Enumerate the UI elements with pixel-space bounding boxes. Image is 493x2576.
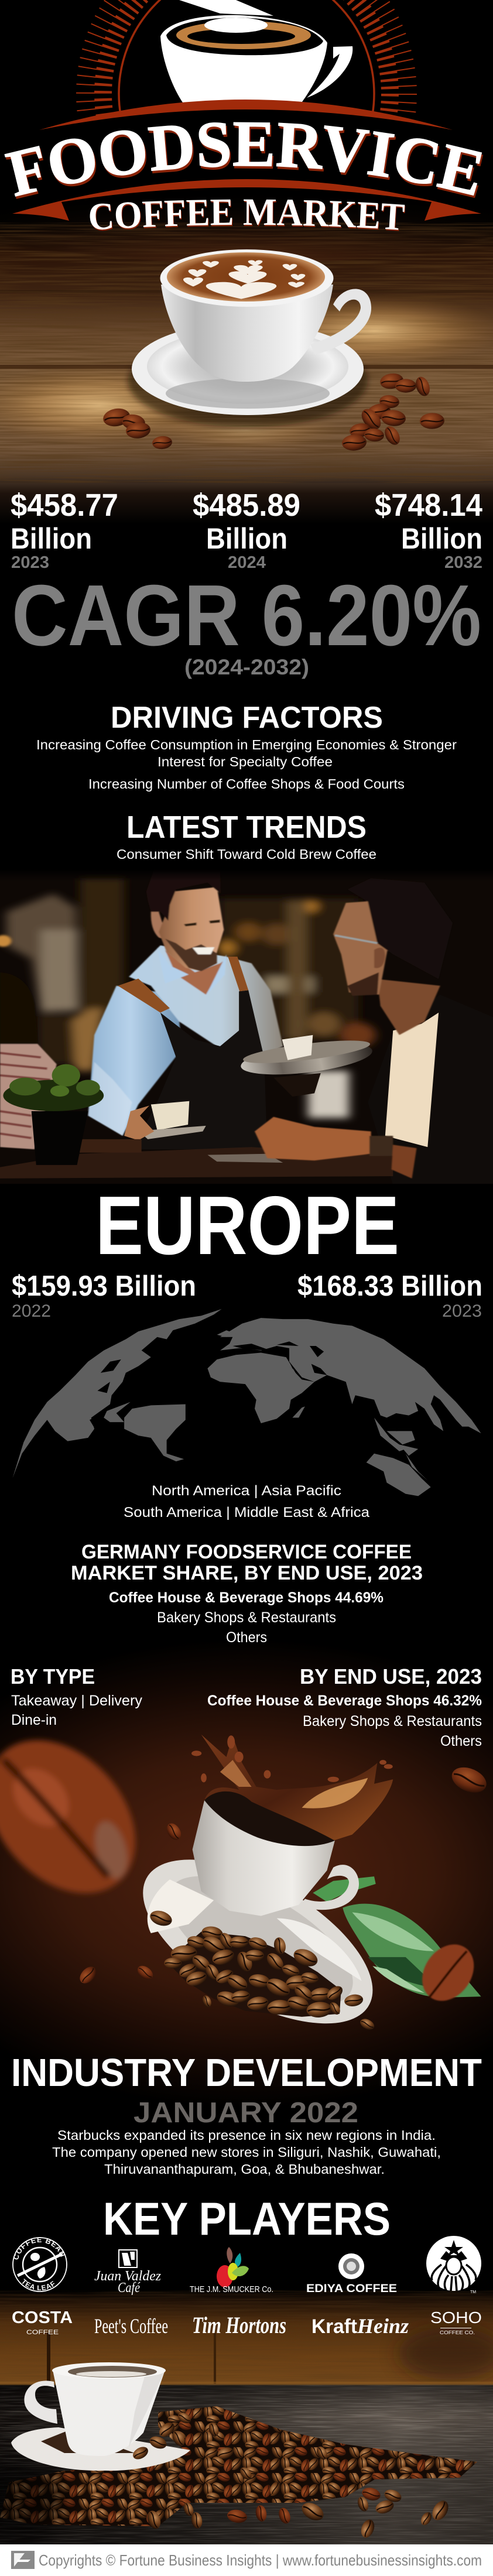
logo: Juan Valdez Cafe: Juan Valdez bbox=[94, 2269, 162, 2284]
panel: market size statistics bbox=[11, 488, 482, 679]
logo: Tim Hortons: Tim Hortons bbox=[192, 2312, 286, 2338]
table top bbox=[0, 2384, 493, 2544]
segment: by type: Dine-in bbox=[11, 1712, 57, 1728]
icon: coffee beans left group bbox=[102, 406, 173, 450]
development description: The company opened new stores in Siliguri, Nashik, Guwahati, bbox=[52, 2145, 441, 2160]
stat 2023: 2023 bbox=[11, 553, 49, 572]
logo: Kraft Heinz: Heinz bbox=[357, 2314, 409, 2338]
driving factors list: Increasing Coffee Consumption in Emerging Economies & Stronger bbox=[36, 737, 457, 752]
stat 2023 bbox=[11, 488, 118, 572]
logo: Coffee Bean & Tea Leaf: COFFEE BEAN bbox=[14, 2237, 66, 2260]
segment: by type: BY TYPE bbox=[11, 1664, 95, 1688]
logo: Juan Valdez Cafe: Café bbox=[118, 2280, 141, 2296]
barista head bbox=[146, 869, 224, 971]
segment: by end use: Coffee House & Beverage Shops 46.32% bbox=[207, 1693, 482, 1709]
heading: EUROPE: EUROPE bbox=[95, 1179, 399, 1272]
panel: segments with coffee illustration bbox=[0, 1664, 491, 2056]
stat Europe 2023 bbox=[297, 1270, 482, 1321]
South America bbox=[124, 1405, 186, 1461]
Southeast Asia islands bbox=[374, 1417, 427, 1481]
stat Europe 2022: 2022 bbox=[12, 1301, 51, 1321]
scattered loose beans bbox=[145, 2486, 451, 2540]
tray with cup bbox=[238, 1035, 375, 1097]
British Isles and Scandinavia bbox=[217, 1330, 236, 1337]
stat 2032: $748.14 bbox=[375, 488, 482, 523]
segment: by end use: Bakery Shops & Restaurants bbox=[303, 1713, 482, 1729]
loose flying beans bbox=[77, 1762, 491, 1986]
title: COFFEE MARKET: COFFEE MARKET bbox=[90, 199, 405, 231]
dark bed under saucer beans bbox=[167, 1931, 341, 2017]
driving factors list bbox=[36, 737, 457, 792]
heading: Germany market share: GERMANY FOODSERVICE COFFEE bbox=[81, 1541, 412, 1563]
wood table backdrop bbox=[0, 170, 493, 486]
stat Europe 2022 bbox=[12, 1270, 196, 1321]
saucer bbox=[11, 2427, 190, 2471]
footer brand icon bbox=[11, 2551, 35, 2569]
Caribbean bbox=[104, 1402, 131, 1422]
illustration: cup, saucer, splash, leaf and beans bbox=[77, 1735, 491, 2056]
stat 2023: $458.77 bbox=[11, 488, 118, 523]
logo: Kraft Heinz: Kraft bbox=[311, 2315, 357, 2338]
logo: Coffee Bean & Tea Leaf bbox=[12, 2237, 67, 2292]
photo: barista serving customer bbox=[0, 867, 493, 1185]
woman at left bbox=[0, 972, 57, 1149]
key player logos bbox=[12, 2236, 482, 2338]
date: JANUARY 2022 bbox=[133, 2097, 358, 2129]
list of other regions bbox=[124, 1483, 370, 1520]
customer jacket bbox=[368, 995, 493, 1185]
segment: by type bbox=[11, 1664, 142, 1728]
logo: Peet's Coffee: Peet's Coffee bbox=[94, 2314, 168, 2338]
plant bbox=[3, 1064, 104, 1165]
latte art hearts bbox=[183, 260, 305, 299]
icon: latte cup on saucer bbox=[128, 249, 371, 427]
saucer bbox=[115, 1827, 400, 2056]
panel: latest trends bbox=[117, 810, 376, 862]
CAGR period: (2024-2032) bbox=[184, 655, 309, 679]
stat 2024: $485.89 bbox=[193, 488, 300, 523]
icon: logo sunburst rays bbox=[76, 0, 417, 116]
Germany share list bbox=[109, 1590, 384, 1646]
stat 2032: 2032 bbox=[444, 553, 482, 572]
icon: coffee beans right group bbox=[341, 372, 444, 451]
barista torso bbox=[88, 946, 283, 1136]
icon: large blurred coffee bean bbox=[0, 1711, 165, 1922]
logo: The J.M. Smucker Co. bbox=[190, 2247, 273, 2294]
photo background bbox=[0, 867, 493, 1185]
icon: logo coffee cup bbox=[160, 0, 352, 104]
blurred bean over leaf bbox=[412, 1936, 484, 2010]
photo: cup and coffee beans on table bbox=[0, 2290, 493, 2544]
driving factors list: Interest for Specialty Coffee bbox=[158, 754, 333, 769]
segment: by end use bbox=[207, 1664, 482, 1749]
world map globe bbox=[12, 1309, 481, 1496]
Australia bbox=[367, 1454, 431, 1496]
shadow over left side of pile bbox=[0, 2465, 70, 2535]
customer hand bbox=[255, 1117, 417, 1179]
logo: Coffee Bean & Tea Leaf: TEA LEAF bbox=[22, 2279, 55, 2290]
logo: Ediya Coffee: EDIYA COFFEE bbox=[306, 2283, 397, 2295]
logo: Costa Coffee: COFFEE bbox=[26, 2329, 59, 2336]
logo: Soho Coffee Co. bbox=[430, 2308, 482, 2335]
table bbox=[0, 1147, 393, 1179]
stat Europe 2023: $168.33 Billion bbox=[297, 1270, 482, 1302]
heading: Germany market share bbox=[71, 1541, 423, 1584]
development description: Starbucks expanded its presence in six new regions in India. bbox=[57, 2128, 436, 2143]
photo top fade bbox=[0, 869, 493, 881]
Germany share list: Others bbox=[226, 1629, 267, 1646]
trend text: Consumer Shift Toward Cold Brew Coffee bbox=[117, 847, 376, 862]
stat 2032 bbox=[375, 488, 482, 572]
beans overlapping cup bbox=[131, 2410, 330, 2496]
stat 2024: 2024 bbox=[228, 553, 266, 572]
logo: Soho Coffee Co.: SOHO bbox=[430, 2308, 482, 2327]
segment: by type: Takeaway | Delivery bbox=[11, 1693, 142, 1709]
panel: industry development bbox=[11, 2051, 482, 2177]
fade from table to black bbox=[0, 483, 493, 524]
segment: by end use: Others bbox=[440, 1733, 482, 1749]
stat 2023: Billion bbox=[11, 522, 92, 555]
heading: driving factors: DRIVING FACTORS bbox=[111, 701, 383, 735]
development description bbox=[52, 2128, 441, 2177]
logo: Starbucks siren bbox=[426, 2236, 481, 2294]
cup body bbox=[193, 1791, 359, 1916]
beans on saucer bbox=[148, 1908, 376, 2032]
cup in hand bbox=[124, 1101, 206, 1140]
development description: Thiruvananthapuram, Goa, & Bhubaneshwar. bbox=[104, 2161, 385, 2177]
white cup bbox=[24, 2362, 166, 2456]
customer head bbox=[333, 878, 453, 1035]
heading: latest trends: LATEST TRENDS bbox=[126, 810, 367, 845]
panel: driving factors bbox=[36, 701, 457, 792]
logo: The J.M. Smucker Co.: THE J.M. SMUCKER Co. bbox=[190, 2284, 273, 2294]
Madagascar bbox=[292, 1406, 305, 1417]
inland seas bbox=[90, 1341, 412, 1431]
bean pile bbox=[0, 2406, 477, 2526]
ribbon: lower red banner with tails bbox=[12, 179, 481, 221]
list of other regions: South America | Middle East & Africa bbox=[124, 1505, 370, 1520]
green leaf bbox=[313, 1876, 481, 1998]
customer shirt bbox=[385, 1013, 439, 1147]
Germany share list: Coffee House & Beverage Shops 44.69% bbox=[109, 1590, 384, 1606]
logo: Costa Coffee bbox=[12, 2308, 73, 2336]
North America bbox=[12, 1309, 222, 1478]
ribbon: upper red arc bbox=[39, 100, 453, 130]
logo: Costa Coffee: COSTA bbox=[12, 2308, 73, 2327]
heading: key players: KEY PLAYERS bbox=[103, 2193, 391, 2245]
title: FOODSERVICE: FOODSERVICE bbox=[5, 122, 484, 199]
heading: Germany market share: MARKET SHARE, BY END USE, 2023 bbox=[71, 1562, 423, 1584]
wooden wall bbox=[0, 2290, 493, 2384]
stat 2024 bbox=[193, 488, 300, 572]
stat 2032: Billion bbox=[401, 522, 482, 555]
stat 2024: Billion bbox=[206, 522, 287, 555]
logo: Soho Coffee Co.: COFFEE CO. bbox=[440, 2330, 475, 2335]
apron bbox=[132, 990, 267, 1149]
segment: by end use: BY END USE, 2023 bbox=[300, 1664, 482, 1688]
panel: Germany market share bbox=[71, 1541, 423, 1646]
coffee splash bbox=[191, 1735, 393, 1841]
logo: Starbucks siren: TM bbox=[470, 2290, 476, 2294]
logo: Kraft Heinz bbox=[311, 2314, 409, 2338]
stat Europe 2022: $159.93 Billion bbox=[12, 1270, 196, 1302]
panel: hero header with wood table bbox=[0, 0, 493, 515]
list of other regions: North America | Asia Pacific bbox=[152, 1483, 341, 1499]
panel: regional section Europe bbox=[12, 1179, 482, 1520]
Eurasia bbox=[220, 1318, 481, 1433]
stat Europe 2023: 2023 bbox=[442, 1301, 482, 1321]
Africa bbox=[207, 1352, 314, 1423]
driving factors list: Increasing Number of Coffee Shops & Food Courts bbox=[88, 776, 405, 792]
brown radial background behind segments bbox=[0, 1639, 493, 2108]
logo: Juan Valdez Cafe bbox=[94, 2250, 162, 2296]
Germany share list: Bakery Shops & Restaurants bbox=[157, 1609, 336, 1626]
logo: Ediya Coffee bbox=[306, 2253, 397, 2295]
footer bbox=[0, 2544, 493, 2576]
lamp glow at left bbox=[0, 935, 11, 947]
